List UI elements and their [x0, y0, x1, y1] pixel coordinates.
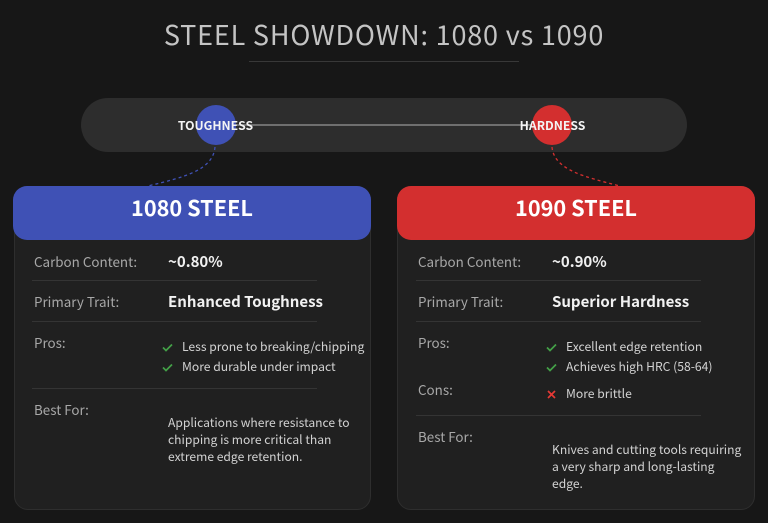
panel header [397, 186, 755, 240]
check icon [546, 364, 556, 372]
carbon content value: ~0.90% [552, 251, 607, 272]
carbon content value: ~0.80% [168, 251, 223, 272]
check icon [546, 344, 556, 352]
check icon [162, 364, 172, 372]
title: STEEL SHOWDOWN: 1080 vs 1090 [164, 14, 604, 53]
pros label: Pros: [418, 332, 450, 352]
best for label: Best For: [34, 399, 89, 419]
cons list [548, 385, 632, 402]
primary trait value: Superior Hardness [552, 291, 689, 312]
slider track [231, 124, 551, 126]
best for text: Knives and cutting tools requiring a very sharp and long-lasting edge. [552, 441, 741, 492]
panel background [397, 186, 755, 510]
primary trait label: Primary Trait: [418, 291, 503, 311]
panel header: 1080 STEEL [131, 192, 253, 223]
pros label: Pros: [34, 332, 66, 352]
cons label: Cons: [418, 379, 453, 399]
toughness node [196, 105, 236, 145]
pro item: Excellent edge retention [566, 338, 702, 355]
pro item: Achieves high HRC (58-64) [566, 358, 712, 375]
panel background [14, 186, 371, 510]
panel: 1080 steel [13, 186, 371, 510]
pro item: Less prone to breaking/chipping [182, 338, 364, 355]
best for text: Applications where resistance to chipping is more critical than extreme edge retention. [168, 414, 350, 465]
check icon [162, 344, 172, 352]
toughness label: TOUGHNESS [178, 116, 253, 134]
pros list [546, 338, 712, 375]
primary trait value: Enhanced Toughness [168, 291, 323, 312]
carbon content label: Carbon Content: [418, 251, 521, 271]
title underline [249, 61, 519, 62]
con item: More brittle [566, 385, 632, 402]
best for label: Best For: [418, 426, 473, 446]
panel header: 1090 STEEL [515, 192, 637, 223]
cross icon [548, 390, 556, 399]
panel: 1090 steel [397, 186, 755, 510]
primary trait label: Primary Trait: [34, 291, 119, 311]
pro item: More durable under impact [182, 358, 336, 375]
carbon content label: Carbon Content: [34, 251, 137, 271]
hardness label: HARDNESS [520, 116, 585, 134]
pros list [162, 338, 364, 375]
panel header [13, 186, 371, 240]
slider: toughness vs hardness [81, 98, 687, 152]
hardness node [532, 105, 572, 145]
